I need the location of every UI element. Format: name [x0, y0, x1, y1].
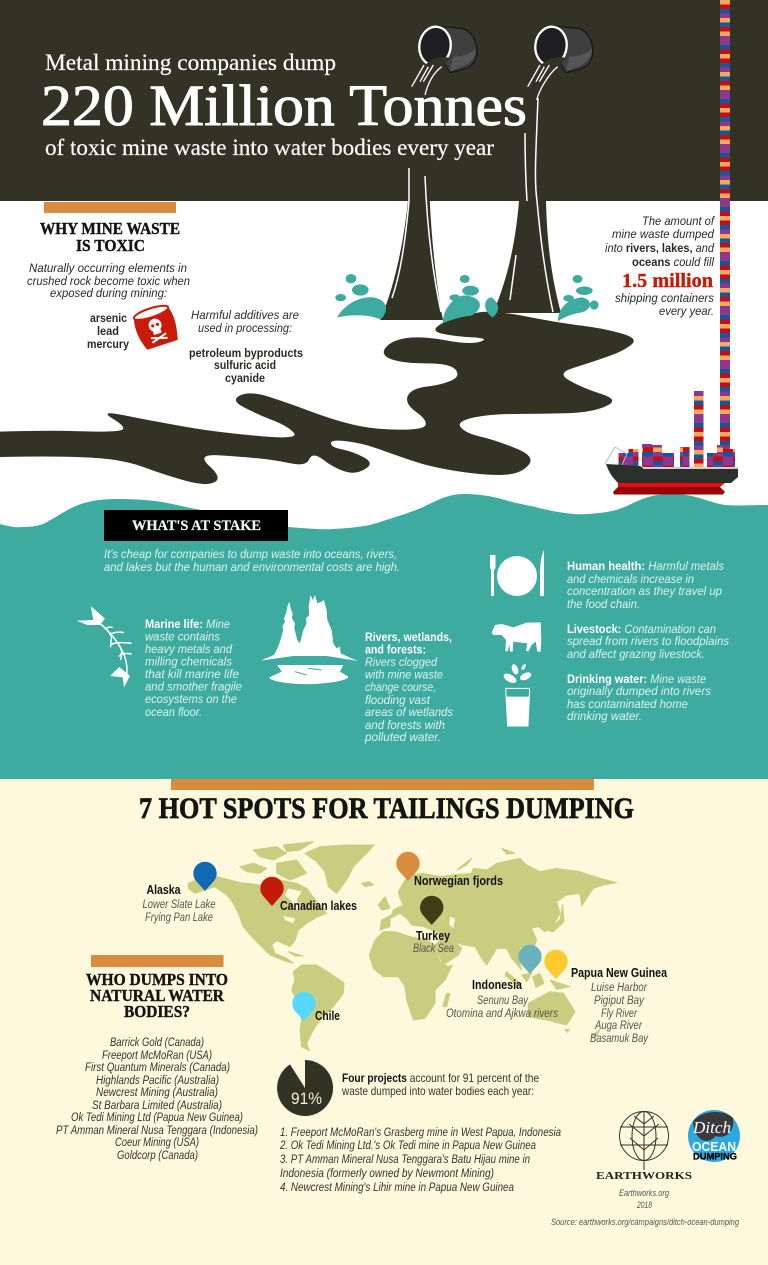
text: natural elements: crushed rock become toxic when [27, 274, 190, 288]
callout: shipping containers: mine waste dumped [612, 227, 714, 241]
icon: right bucket [528, 25, 593, 100]
company list: Coeur Mining (USA) [115, 1137, 199, 1149]
text: drinking water: originally dumped into rivers [567, 684, 711, 698]
map pin: Indonesia [518, 945, 542, 974]
text: additives list: sulfuric acid [214, 358, 276, 372]
text: human health: Human health: Harmful metals [567, 559, 724, 573]
company list: PT Amman Mineral Nusa Tenggara (Indonesia) [56, 1125, 258, 1137]
map: eurasia, africa and australia [369, 848, 617, 1036]
pie chart: 91 percent [277, 1060, 333, 1116]
deck line [643, 467, 738, 469]
map label: Norwegian fjords: Norwegian fjords [414, 874, 503, 888]
icon: left bucket [412, 25, 477, 95]
list: four mining projects [279, 1127, 561, 1194]
list: four mining projects: 3. PT Amman Mineral Nusa Tenggara's Batu Hijau mine in [280, 1154, 530, 1166]
map pin: Alaska [193, 862, 217, 891]
map label: Turkey [413, 929, 454, 955]
text: toxic elements list: lead [97, 324, 119, 338]
map label: Alaska [142, 883, 216, 924]
text: human health: concentration as they travel up [567, 584, 722, 598]
callout: shipping containers [605, 214, 716, 318]
company list: Goldcorp (Canada) [117, 1150, 198, 1162]
teal splashes [335, 274, 599, 323]
map label: Chile: Chile [315, 1009, 340, 1023]
map label: Canadian lakes: Canadian lakes [280, 899, 357, 913]
text: additives list: cyanide [225, 371, 265, 385]
text: livestock: spread from rivers to floodplains [567, 634, 729, 648]
list: four mining projects: 4. Newcrest Mining's Lihir mine in Papua New Guinea [280, 1182, 514, 1194]
company list: Highlands Pacific (Australia) [96, 1075, 219, 1087]
company list: Ok Tedi Mining Ltd (Papua New Guinea) [71, 1112, 243, 1124]
illustration: container ship and stacks [605, 0, 738, 494]
company list: St Barbara Limited (Australia) [92, 1100, 222, 1112]
map pin: Norwegian fjords [396, 852, 420, 881]
panel: who dumps [56, 955, 258, 1162]
callout: shipping containers: oceans could fill [632, 255, 714, 269]
red hull band [618, 483, 725, 487]
map pin: Papua New Guinea [544, 950, 568, 979]
text: drinking water: has contaminated home [567, 697, 688, 711]
text: rivers, wetlands and forests: areas of wetlands [365, 705, 453, 719]
panel: why mine waste is toxic [27, 202, 303, 385]
intro text: It's cheap for companies to dump waste into oceans, rivers, [104, 547, 397, 561]
map: americas and greenland [188, 842, 374, 1051]
map label: Papua New Guinea: Papua New Guinea [571, 966, 668, 980]
pie chart: 91 percent: 91% [291, 1089, 322, 1108]
text: livestock: Livestock: Contamination can [567, 622, 716, 636]
text: additives list: petroleum byproducts [189, 346, 303, 360]
list: four mining projects: 1. Freeport McMoRan's Grasberg mine in West Papua, Indonesia [280, 1127, 561, 1139]
title line one: Metal mining companies dump [45, 50, 336, 75]
text: marine life: waste contains [145, 630, 220, 644]
logo: Ditch Ocean Dumping: DUMPING [693, 1152, 737, 1162]
text: human health: and chemicals increase in [567, 572, 694, 586]
panel: dark header [0, 0, 768, 201]
intro text: and lakes but the human and environmental costs are high. [104, 560, 400, 574]
text: toxic elements list: arsenic [90, 311, 127, 325]
tall container column [720, 0, 730, 450]
text: human health [567, 559, 724, 611]
text: marine life [145, 617, 242, 719]
icon: cow [492, 622, 541, 652]
callout: shipping containers: into rivers, lakes, and [605, 241, 714, 255]
text: human health: the food chain. [567, 597, 640, 611]
map label: Papua New Guinea: Luise Harbor [591, 982, 648, 994]
icon: trees and water [261, 595, 358, 684]
credits [551, 1188, 739, 1227]
map label: Indonesia: Indonesia [472, 978, 523, 992]
logo: Ditch Ocean Dumping: OCEAN [692, 1139, 736, 1154]
text: rivers, wetlands and forests: with mine waste [365, 668, 443, 682]
icon: toxic barrel [131, 302, 181, 351]
text: rivers, wetlands and forests [364, 630, 453, 744]
orange bar [91, 955, 224, 967]
map label: Papua New Guinea: Basamuk Bay [590, 1033, 649, 1045]
heading: WHY MINE WASTE [40, 219, 180, 238]
right stream [493, 92, 561, 313]
text: rivers, wetlands and forests: Rivers, wetlands, [365, 630, 452, 644]
text: rivers, wetlands and forests: Rivers clogged [365, 655, 437, 669]
text: rivers, wetlands and forests: and forests with [365, 718, 445, 732]
heading bar [104, 510, 288, 541]
text: marine life: ocean floor. [145, 705, 202, 719]
text: natural elements: exposed during mining: [50, 286, 167, 300]
callout: shipping containers: 1.5 million [622, 270, 713, 292]
orange bar above hot spots heading [171, 779, 594, 790]
panel: teal stake wave background [0, 494, 768, 779]
dark red keel [613, 487, 725, 494]
text: harmful additives [191, 308, 299, 335]
intro text [104, 547, 400, 574]
text: harmful additives: used in processing: [198, 321, 292, 335]
map label: Papua New Guinea: Pigiput Bay [594, 995, 645, 1007]
map label: Alaska: Lower Slate Lake [142, 899, 216, 911]
text: marine life: milling chemicals [145, 654, 232, 668]
callout: shipping containers: every year. [659, 304, 714, 318]
ship rail [605, 447, 627, 465]
map pin: Chile [292, 992, 316, 1021]
logo: Earthworks [596, 1112, 692, 1182]
map label: Papua New Guinea: Auga River [594, 1020, 643, 1032]
map label: Indonesia: Otomina and Ajkwa rivers [446, 1008, 558, 1020]
logo: Ditch Ocean Dumping: Ditch [692, 1118, 731, 1137]
map label: Papua New Guinea: Fly River [601, 1008, 638, 1020]
map label: Papua New Guinea [571, 966, 668, 1045]
map label: Alaska: Frying Pan Lake [145, 912, 213, 924]
text: marine life: that kill marine life [145, 667, 239, 681]
text: drinking water: drinking water. [567, 709, 642, 723]
text: marine life: and smother fragile [145, 680, 242, 694]
orange bar [44, 202, 176, 213]
heading bar: WHAT'S AT STAKE [132, 518, 261, 534]
company list: Freeport McMoRan (USA) [102, 1050, 212, 1062]
text: four projects: Four projects account for 91 percent of the [342, 1071, 539, 1085]
title line three: of toxic mine waste into water bodies every year [45, 135, 494, 160]
list: four mining projects: 2. Ok Tedi Mining Ltd.'s Ok Tedi mine in Papua New Guinea [279, 1140, 536, 1152]
panel: what's at stake [77, 510, 729, 744]
text: marine life: ecosystems on the [145, 692, 237, 706]
map label: Indonesia [446, 978, 558, 1020]
credits: 2018 [636, 1200, 652, 1210]
text: drinking water: Drinking water: Mine waste [567, 672, 706, 686]
company list: Newcrest Mining (Australia) [96, 1087, 218, 1099]
heading: BODIES? [124, 1002, 190, 1021]
map pin: Canadian lakes [260, 877, 284, 906]
short container column [694, 391, 704, 467]
ship hull [606, 464, 738, 483]
text: rivers, wetlands and forests: and forests: [365, 642, 426, 656]
text: natural elements [27, 261, 190, 300]
text: marine life: heavy metals and [145, 642, 232, 656]
text: toxic elements list [87, 311, 129, 351]
text: drinking water [567, 672, 711, 723]
text: livestock [567, 622, 729, 661]
text: harmful additives: Harmful additives are [191, 308, 299, 322]
text: livestock: and affect grazing livestock. [567, 647, 705, 661]
icon: plate and cutlery [490, 550, 544, 596]
logo: Earthworks: EARTHWORKS [596, 1171, 692, 1182]
heading [86, 970, 228, 1021]
map label: Indonesia: Senunu Bay [477, 995, 529, 1007]
text: four projects: waste dumped into water bodies each year: [341, 1084, 534, 1098]
world map [188, 842, 617, 1051]
text: additives list [189, 346, 303, 385]
callout: shipping containers: The amount of [642, 214, 716, 228]
text: rivers, wetlands and forests: change course, [365, 680, 436, 694]
heading: WHO DUMPS INTO [86, 970, 228, 989]
text: natural elements: Naturally occurring elements in [29, 261, 187, 275]
list: four mining projects: Indonesia (formerly owned by Newmont Mining) [280, 1168, 494, 1180]
map label: Turkey: Turkey [416, 929, 450, 943]
title block [41, 50, 527, 160]
callout: shipping containers: shipping containers [615, 291, 714, 305]
company list: Barrick Gold (Canada) [110, 1037, 204, 1049]
text: rivers, wetlands and forests: flooding vast [365, 693, 431, 707]
company list [56, 1037, 258, 1162]
icon: glass with splash [502, 663, 533, 726]
icon: fish skeleton [77, 606, 132, 687]
text: four projects [341, 1071, 539, 1098]
illustration: toxic waste spill [0, 92, 634, 484]
text: toxic elements list: mercury [87, 337, 129, 351]
map label: Turkey: Black Sea [413, 943, 454, 955]
heading: hot spots: 7 HOT SPOTS FOR TAILINGS DUMPING [139, 792, 634, 825]
text: rivers, wetlands and forests: polluted water. [364, 730, 441, 744]
deck containers [618, 444, 735, 467]
logo: Ditch Ocean Dumping [688, 1110, 740, 1162]
credits: Earthworks.org [619, 1188, 669, 1198]
heading [40, 219, 180, 255]
panel: cream hot spots background [0, 779, 768, 1265]
text: marine life: Marine life: Mine [145, 617, 230, 631]
map label: Alaska: Alaska [146, 883, 181, 897]
company list: First Quantum Minerals (Canada) [85, 1062, 230, 1074]
main title: 220 Million Tonnes [41, 73, 527, 138]
heading: IS TOXIC [76, 236, 145, 255]
oil slick blob [0, 312, 634, 484]
heading: NATURAL WATER [90, 986, 225, 1005]
left stream [380, 168, 443, 320]
map pin: Turkey [420, 896, 443, 925]
